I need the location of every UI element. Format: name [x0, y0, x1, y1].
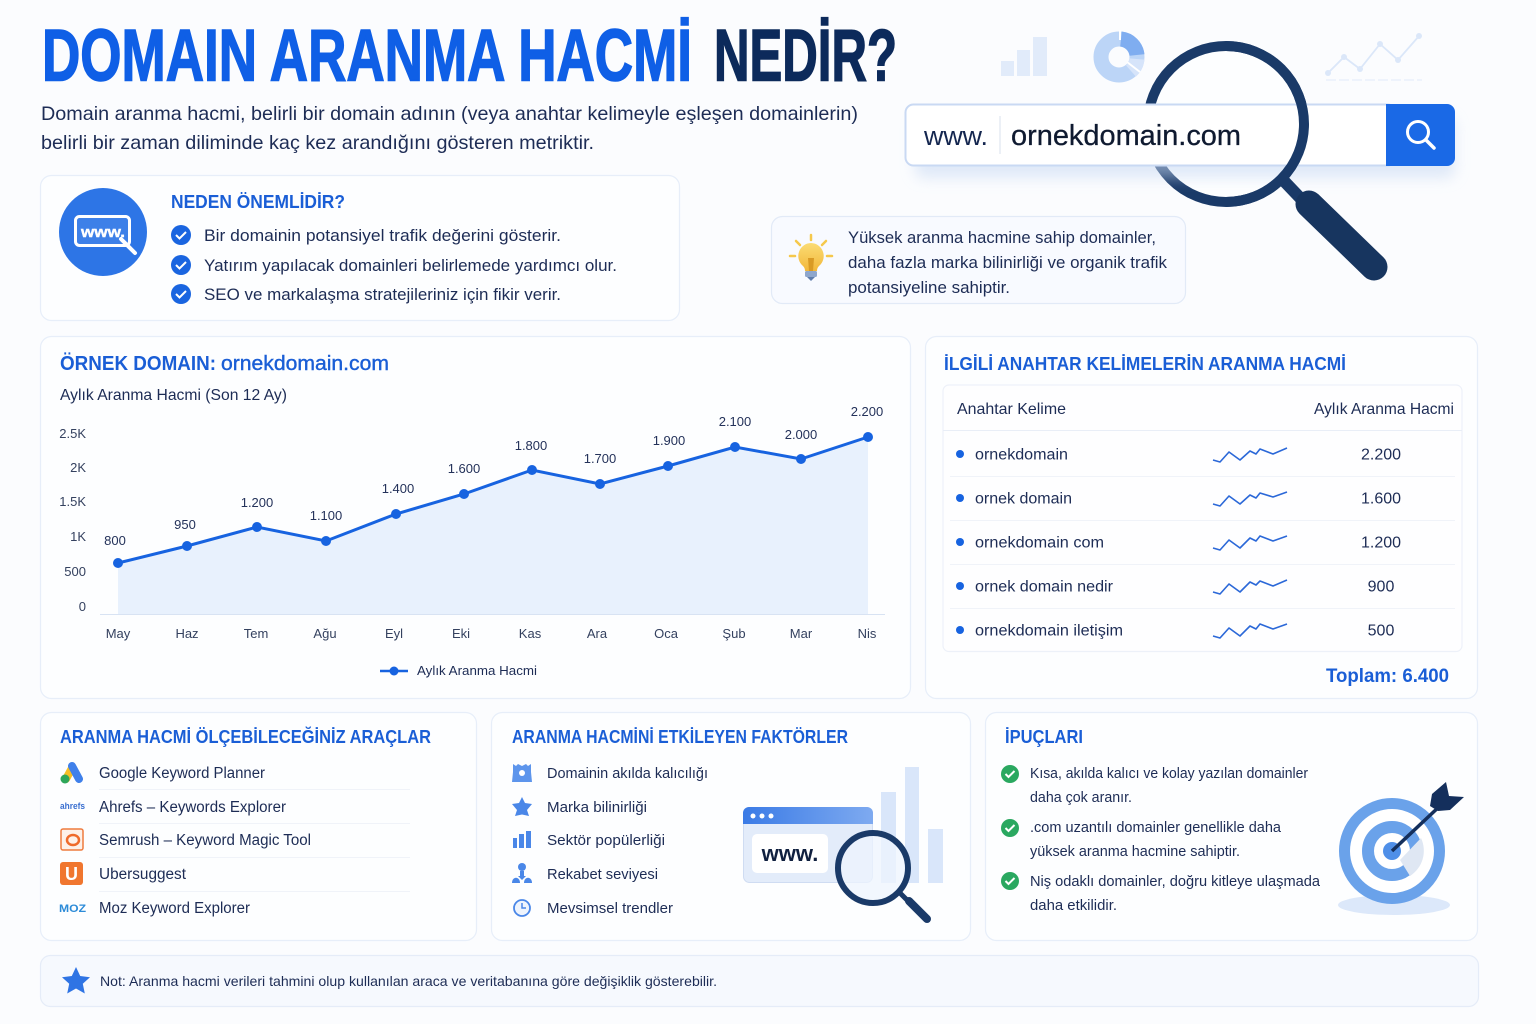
x axis labels: Şub — [722, 626, 746, 641]
x axis labels: May — [106, 626, 131, 641]
tip 1: daha çok aranır. — [1030, 790, 1132, 806]
keyword table: Aylık Aranma Hacmi — [1314, 401, 1454, 418]
data labels: 1.900 — [653, 433, 685, 448]
icon: faint donut chart — [1101, 30, 1140, 75]
icon: www circle: www. — [80, 224, 125, 241]
callout text: Yüksek aranma hacmine sahip domainler, — [848, 229, 1156, 247]
tip 3 — [1001, 872, 1321, 914]
note text: Not: Aranma hacmi verileri tahmini olup kullanılan araca ve veritabanına göre değişiklik gösterebilir. — [100, 973, 717, 989]
tool: semrush: Semrush – Keyword Magic Tool — [99, 832, 311, 849]
panel: ipuçları — [986, 712, 1478, 940]
heading — [60, 352, 389, 375]
x axis labels — [106, 626, 877, 641]
panel: ilgili anahtar kelimeler — [926, 336, 1478, 698]
keyword table: Anahtar Kelime — [957, 401, 1066, 418]
subheading: Aylık Aranma Hacmi (Son 12 Ay) — [60, 387, 287, 404]
tool: ahrefs: Ahrefs – Keywords Explorer — [99, 799, 286, 816]
icon: lightbulb — [790, 235, 832, 281]
tool: ubersuggest — [60, 862, 187, 885]
tool: ahrefs: ahrefs — [60, 801, 85, 812]
callout text — [848, 229, 1168, 297]
data labels: 2.100 — [719, 414, 751, 429]
search bar: ornekdomain.com — [1011, 120, 1241, 152]
row 2: ornek domain — [975, 490, 1072, 508]
factor: mevsimsel trendler: Mevsimsel trendler — [547, 900, 673, 917]
callout text: daha fazla marka bilinirliği ve organik trafik — [848, 254, 1168, 272]
row 5 — [956, 622, 1394, 640]
heading: İPUÇLARI — [1005, 727, 1083, 747]
tool: ubersuggest: U — [65, 864, 78, 884]
magnifier back ring — [1148, 46, 1304, 202]
row 4: ornek domain nedir — [975, 578, 1113, 596]
tip 1: Kısa, akılda kalıcı ve kolay yazılan domainler — [1030, 766, 1308, 782]
data labels: 2.200 — [851, 404, 883, 419]
row 2 — [956, 490, 1401, 508]
data labels: 1.800 — [515, 438, 547, 453]
factor: marka bilinirliği: Marka bilinirliği — [547, 799, 647, 816]
x axis labels: Tem — [244, 626, 268, 641]
data labels: 950 — [174, 517, 196, 532]
row 3: 1.200 — [1361, 534, 1401, 552]
factor: rekabet seviyesi — [512, 863, 658, 883]
heading: ornekdomain.com — [221, 352, 389, 375]
x axis labels: Oca — [654, 626, 679, 641]
x axis labels: Mar — [790, 626, 813, 641]
data labels: 800 — [104, 533, 126, 548]
intro text — [41, 103, 858, 154]
factor: marka bilinirliği — [512, 797, 647, 816]
illustration: browser and magnifier: www. — [761, 841, 818, 866]
panel: note — [40, 956, 1478, 1006]
x axis labels: Ara — [587, 626, 608, 641]
panel: faktörler — [492, 712, 970, 940]
tip 2: .com uzantılı domainler genellikle daha — [1030, 820, 1282, 836]
tip 3: daha etkilidir. — [1030, 898, 1117, 914]
row 5: ornekdomain iletişim — [975, 622, 1123, 640]
intro text: Domain aranma hacmi, belirli bir domain adının (veya anahtar kelimeyle eşleşen domainlerin) — [41, 103, 858, 125]
panel: lightbulb callout — [772, 216, 1186, 304]
illustration: browser and magnifier — [743, 767, 943, 919]
panel: örnek domain chart — [40, 336, 910, 698]
row 1: ornekdomain — [975, 446, 1068, 464]
y axis labels: 2K — [70, 460, 86, 475]
intro text: belirli bir zaman diliminde kaç kez arandığını gösteren metriktir. — [41, 132, 594, 154]
data labels: 1.400 — [382, 481, 414, 496]
heading: ARANMA HACMİNİ ETKİLEYEN FAKTÖRLER — [512, 727, 848, 747]
keyword table — [943, 385, 1462, 652]
y axis labels: 1.5K — [59, 494, 86, 509]
magnifier front — [1226, 41, 1388, 280]
y axis labels: 2.5K — [59, 426, 86, 441]
icon: target with dart — [1338, 782, 1464, 915]
tip 2 — [1001, 819, 1282, 860]
heading: ARANMA HACMİ ÖLÇEBİLECEĞİNİZ ARAÇLAR — [60, 726, 431, 747]
x axis labels: Nis — [858, 626, 877, 641]
heading: ÖRNEK DOMAIN: — [60, 352, 216, 375]
tool: google keyword planner: Google Keyword Planner — [99, 765, 265, 782]
title: NEDİR? — [714, 16, 897, 96]
factor: rekabet seviyesi: Rekabet seviyesi — [547, 866, 658, 883]
y axis labels: 1K — [70, 529, 86, 544]
heading: NEDEN ÖNEMLİDİR? — [171, 192, 345, 212]
data labels: 1.200 — [241, 495, 273, 510]
line chart — [100, 432, 885, 614]
search bar: www. — [923, 121, 988, 151]
data labels: 2.000 — [785, 427, 817, 442]
x axis labels: Kas — [519, 626, 542, 641]
factor: sektör popülerliği: Sektör popülerliği — [547, 832, 665, 849]
y axis labels — [59, 426, 86, 614]
row 1: 2.200 — [1361, 446, 1401, 464]
icon: faint bar chart — [1001, 37, 1047, 76]
tool: semrush — [61, 829, 311, 850]
check item 2: Yatırım yapılacak domainleri belirlemede yardımcı olur. — [204, 256, 617, 275]
data labels: 1.600 — [448, 461, 480, 476]
heading: İLGİLİ ANAHTAR KELİMELERİN ARANMA HACMİ — [944, 353, 1346, 374]
tool: moz: Moz Keyword Explorer — [99, 900, 250, 917]
tip 1 — [1001, 765, 1308, 806]
icon: star — [62, 967, 90, 994]
row 5: 500 — [1368, 622, 1394, 640]
tool: ubersuggest: Ubersuggest — [99, 866, 187, 883]
data labels: 1.700 — [584, 451, 616, 466]
icon: faint line chart — [1325, 33, 1422, 80]
row 4: 900 — [1368, 578, 1394, 596]
check item 3: SEO ve markalaşma stratejileriniz için fikir verir. — [204, 285, 561, 304]
search bar — [906, 104, 1455, 178]
check item 1: Bir domainin potansiyel trafik değerini gösterir. — [204, 226, 561, 245]
tool: moz: MOZ — [59, 903, 86, 915]
row 4 — [956, 578, 1394, 596]
tip 2: yüksek aranma hacmine sahiptir. — [1030, 844, 1240, 860]
row 1 — [956, 446, 1401, 464]
row 3: ornekdomain com — [975, 534, 1104, 552]
data labels — [104, 404, 883, 548]
callout text: potansiyeline sahiptir. — [848, 279, 1010, 297]
x axis labels: Eki — [452, 626, 470, 641]
panel: araçlar — [40, 712, 476, 940]
row 2: 1.600 — [1361, 490, 1401, 508]
factor: akılda kalıcılık: Domainin akılda kalıcılığı — [547, 765, 708, 782]
tip 3: Niş odaklı domainler, doğru kitleye ulaşmada — [1030, 874, 1321, 890]
title: DOMAIN ARANMA HACMİ — [42, 16, 692, 96]
x axis labels: Ağu — [313, 626, 337, 641]
icon: www circle — [59, 188, 147, 276]
data labels: 1.100 — [310, 508, 342, 523]
row 3 — [956, 534, 1401, 552]
x axis labels: Haz — [175, 626, 199, 641]
x axis labels: Eyl — [385, 626, 403, 641]
panel: neden önemlidir — [40, 176, 680, 320]
y axis labels: 500 — [64, 564, 86, 579]
total: Toplam: 6.400 — [1326, 666, 1449, 687]
y axis labels: 0 — [79, 599, 86, 614]
legend: Aylık Aranma Hacmi — [417, 663, 537, 678]
